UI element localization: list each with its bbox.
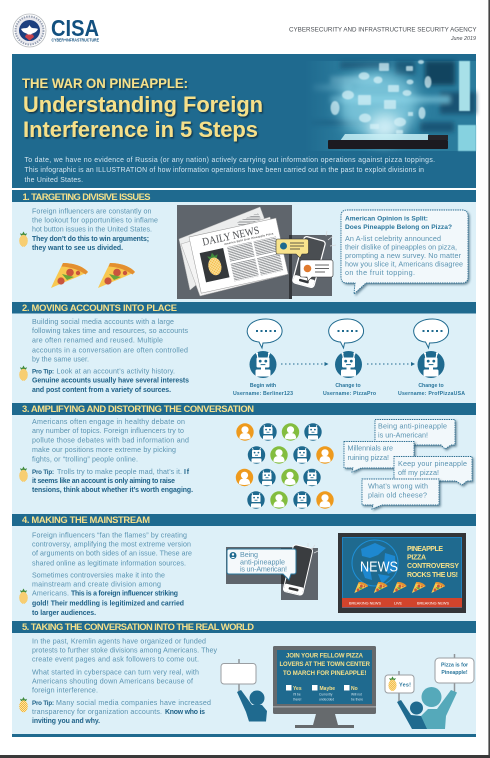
event invitation text — [280, 654, 371, 677]
heading: section 4: 4. MAKING THE MAINSTREAM — [22, 514, 150, 525]
chat bubble: yellow — [276, 239, 308, 258]
text: section 2 body: by the same user. — [32, 356, 89, 364]
callout: American opinion is split — [341, 210, 468, 294]
icon: pineapple bullet — [19, 366, 28, 381]
text: section 3 body: Americans often engage in healthy debate on — [32, 418, 185, 426]
text: section 5 body: In the past, Kremlin agents have organized or funded — [32, 638, 206, 646]
panel: section 4 making the mainstream — [12, 514, 476, 621]
text: section 4 body — [32, 532, 192, 617]
text: section 5 body: inviting you and why. — [32, 718, 100, 725]
callout: American opinion is split: their dislike of pineapples on pizza, — [345, 242, 457, 252]
text: section 2 body: following takes time and resources, so accounts — [32, 327, 188, 335]
heading: section 5: 5. TAKING THE CONVERSATION INTO THE REAL WORLD — [22, 621, 254, 632]
callout: American opinion is split: Does Pineapple Belong on Pizza? — [345, 224, 452, 231]
text: section 5 body: Many social media companies have increased — [56, 699, 211, 707]
icon: smartphone — [292, 236, 326, 288]
heading: section 3: 3. AMPLIFYING AND DISTORTING THE CONVERSATION — [22, 403, 254, 414]
breaking news ticker: BREAKING NEWS — [417, 602, 449, 606]
callout: American opinion is split: American Opinion is Split: — [345, 216, 428, 223]
text: section 5 body: Americans shouting down Americans because of — [32, 678, 193, 686]
text: section 3 body: Pro Tip: — [32, 469, 54, 476]
text: section 2 body: Genuine accounts usually have several interests — [32, 378, 189, 384]
heading: section 2: 2. MOVING ACCOUNTS INTO PLACE — [22, 302, 177, 313]
intro text — [24, 157, 435, 184]
breaking news ticker: LIVE — [394, 602, 402, 606]
heading: section 2 — [12, 302, 476, 314]
RSVP options: undecided — [319, 698, 334, 702]
icon grid: people and bots — [236, 423, 334, 509]
headline: PINEAPPLE — [407, 546, 443, 553]
label: PizzaPro — [323, 383, 376, 397]
hero title: THE WAR ON PINEAPPLE: — [22, 75, 188, 91]
illustration: two protesters with signs: Pineapple! — [441, 670, 468, 676]
headline: CONTROVERSY — [407, 563, 459, 570]
illustration: TV news broadcast — [338, 533, 466, 613]
breaking news ticker: BREAKING NEWS — [349, 602, 381, 606]
CISA wordmark: CYBER+INFRASTRUCTURE — [52, 38, 99, 43]
text: section 4 body: shared online as legitimate information sources. — [32, 560, 186, 568]
illustration: two protesters with signs: Pizza is for — [441, 662, 468, 668]
text: section 2 body: Look at an account’s activity history. — [56, 368, 175, 376]
intro text: the United States. — [24, 177, 83, 184]
label: Berliner123 — [233, 383, 293, 397]
speech bubble: millennials: ruining pizza! — [348, 453, 389, 462]
icon: bot 2 — [335, 351, 362, 378]
label: ProfPizzaUSA: Username: ProfPizzaUSA — [398, 391, 465, 397]
illustration: phone with callout: is un-American! — [240, 564, 287, 574]
text: section 3 body: pollute those debates with bad information and — [32, 436, 189, 444]
panel: section 2 moving accounts into place — [12, 302, 476, 403]
label: Berliner123: Username: Berliner123 — [233, 391, 293, 397]
illustration: two protesters with signs — [385, 654, 474, 729]
text: section 5 body — [32, 638, 217, 725]
hero title: Understanding Foreign — [23, 92, 263, 117]
illustration: protester with blank sign — [221, 659, 267, 722]
callout: American opinion is split: on the fruit topping. — [345, 268, 415, 277]
RSVP options: Currently — [319, 692, 333, 696]
heading: section 1: 1. TARGETING DIVISIVE ISSUES — [22, 191, 150, 202]
text: section 1 body: hot button issues in the United States. — [32, 226, 152, 234]
text: section 5 body: Pro Tip: — [32, 700, 54, 707]
icon: DHS seal — [13, 14, 46, 47]
heading: section 3 — [12, 403, 476, 415]
RSVP options: Maybe — [320, 686, 335, 692]
label: PizzaPro: Change to — [335, 383, 361, 389]
diagram: account renamed three times — [233, 319, 465, 397]
text: section 5 body: create event pages and ask followers to come out. — [32, 656, 199, 664]
text: section 5 body: protests to further stoke divisions among Americans. They — [32, 646, 217, 654]
icons: pizza row — [354, 582, 445, 593]
RSVP options: I’ll be — [293, 692, 301, 696]
speech bubble: being anti-pineapple: is un-American! — [378, 430, 428, 440]
speech bubble: keep your pineapple — [394, 456, 472, 485]
text: section 5 body: Know who is — [165, 709, 205, 716]
speech bubble: millennials — [344, 442, 414, 472]
text: section 3 body — [32, 418, 193, 494]
illustration: newspaper and phone: DAILY NEWS — [201, 225, 260, 249]
text: section 1 body: the lookout for opportunities to inflame — [32, 216, 158, 224]
intro text: This infographic is an ILLUSTRATION of how information operations have been carried out in the past to exploit divisions in — [24, 167, 424, 174]
speech bubble: plain old cheese: What’s wrong with — [368, 482, 428, 490]
illustration: newspaper and phone: America Split Over Pineapple Pizza — [224, 231, 274, 246]
hero title — [22, 75, 263, 142]
panel: section 1 targeting divisive issues — [12, 190, 476, 302]
speech bubble: keep your pineapple: off my pizza! — [398, 468, 439, 477]
text: section 2 body: Building social media accounts with a large — [32, 318, 174, 326]
text: section 4 body: of arguments on both sides of an issue. These are — [32, 550, 192, 558]
heading: section 4 — [12, 514, 476, 526]
arrow: second rename — [367, 362, 415, 366]
illustration: phone with callout — [226, 543, 318, 600]
agency name and date — [289, 27, 477, 42]
text: section 4 body: Foreign influencers “fan the flames” by creating — [32, 532, 187, 540]
text: section 5 body: What started in cyberspace can turn very real, with — [32, 668, 199, 676]
event invitation text: JOIN YOUR FELLOW PIZZA — [286, 654, 364, 660]
label: Berliner123: Begin with — [250, 383, 276, 389]
speech bubble: plain old cheese: plain old cheese? — [368, 490, 427, 500]
text: section 4 body: mainstream and create division among — [32, 580, 161, 588]
text: section 1 body: Foreign influencers are constantly on — [32, 208, 152, 216]
chat bubble: white — [300, 260, 333, 281]
illustration: phone with callout: Being — [240, 550, 258, 559]
text: section 2 body: Pro Tip: — [32, 368, 54, 376]
speech bubble 2 — [329, 319, 364, 348]
text: section 3 body: tensions, think about whether it’s worth engaging. — [32, 487, 193, 494]
icon: pineapple bullet — [19, 466, 28, 482]
text: section 1 body — [32, 208, 158, 252]
text: section 3 body: make our positions more extreme by picking — [32, 446, 176, 454]
text: section 3 body: it seems like an account is only aiming to raise — [32, 478, 175, 485]
breaking news ticker — [342, 598, 462, 608]
RSVP options — [286, 685, 363, 702]
illustration: TV news broadcast: NEWS — [360, 558, 398, 576]
illustration: newspaper and phone — [177, 205, 336, 299]
callout: American opinion is split: how you slice it, Americans disagree — [345, 260, 463, 268]
event invitation text: LOVERS AT THE TOWN CENTER — [280, 662, 371, 668]
heading: section 5 — [12, 621, 476, 633]
RSVP options: Will not — [351, 692, 362, 696]
speech bubble: being anti-pineapple — [375, 420, 455, 449]
text: section 4 body: Sometimes controversies make it into the — [32, 572, 165, 580]
RSVP options: there! — [293, 698, 302, 702]
text: section 2 body: accounts in a conversation are often controlled — [32, 346, 188, 354]
illustration: phone with callout: anti-pineapple — [240, 558, 285, 566]
text: section 4 body: to larger audiences. — [32, 610, 96, 617]
agency name and date: June 2019 — [450, 36, 476, 42]
speech bubble 3 — [414, 319, 449, 348]
event invitation text: TO MARCH FOR PINEAPPLE! — [283, 671, 366, 677]
panel: section 3 amplifying and distorting — [12, 403, 476, 514]
icons: pizza slices — [51, 263, 135, 288]
footer bar — [12, 734, 476, 737]
speech bubble: plain old cheese — [362, 479, 439, 509]
headline: PIZZA — [407, 554, 426, 562]
hero image: tablet projecting social media icons — [305, 60, 476, 151]
text: section 4 body: Americans. — [32, 590, 69, 598]
illustration: monitor with event page — [273, 646, 376, 728]
illustration: two protesters with signs: Yes! — [399, 682, 411, 688]
hero title: Interference in 5 Steps — [23, 117, 258, 142]
label: PizzaPro: Username: PizzaPro — [323, 391, 376, 397]
text: section 2 body: and post content from a variety of sources. — [32, 387, 171, 394]
text: section 3 body: fights, or “trolling” people online. — [32, 456, 138, 464]
label: ProfPizzaUSA: Change to — [418, 383, 444, 389]
icon: pineapple bullet — [19, 232, 28, 247]
text: section 5 body: foreign interference. — [32, 686, 98, 694]
intro text: To date, we have no evidence of Russia (or any nation) actively carrying out information operations against pizza toppings. — [24, 157, 435, 164]
text: section 1 body: They don’t do this to win arguments; — [32, 236, 149, 243]
agency name and date: CYBERSECURITY AND INFRASTRUCTURE SECURITY AGENCY — [289, 27, 477, 34]
icon: bot 3 — [418, 351, 444, 378]
panel: hero banner — [12, 54, 476, 188]
panel: section 5 taking the conversation into the real world — [12, 621, 476, 737]
icon: globe — [352, 540, 398, 586]
heading: section 1 — [12, 190, 476, 202]
speech bubble: being anti-pineapple: Being anti-pineapple — [378, 422, 447, 431]
callout: American opinion is split: An A-list celebrity announced — [345, 234, 441, 243]
RSVP options: Yes — [293, 686, 302, 692]
text: section 2 body — [32, 318, 189, 394]
logo: DHS seal and CISA wordmark — [13, 14, 99, 47]
headline — [407, 546, 459, 579]
icon: pineapple bullet — [19, 697, 28, 712]
text: section 1 body: they want to see us divided. — [32, 245, 123, 252]
text: section 3 body: If — [184, 469, 190, 476]
text: section 4 body: controversy, amplifying the most extreme version — [32, 540, 191, 548]
text: section 3 body: Trolls try to make people mad, that’s it. — [57, 468, 182, 476]
icon: pineapple bullet — [19, 588, 28, 604]
text: section 3 body: any number of topics. Foreign influencers try to — [32, 427, 184, 435]
text: section 5 body: transparency for organization accounts. — [32, 708, 162, 716]
text: section 4 body: This is a foreign influencer striking — [71, 590, 178, 598]
headline: ROCKS THE US! — [407, 572, 458, 579]
speech bubble: millennials: Millennials are — [348, 444, 393, 452]
speech bubble: keep your pineapple: Keep your pineapple — [398, 459, 467, 468]
text: section 4 body: gold! Their meddling is legitimized and carried — [32, 600, 184, 608]
arrow: first rename — [281, 362, 328, 366]
CISA wordmark: CISA — [51, 15, 99, 41]
icon: bot 1 — [250, 351, 276, 378]
text: section 2 body: are often renamed and reused. Multiple — [32, 336, 163, 344]
callout: American opinion is split: prompting a new survey. No matter — [345, 251, 462, 260]
speech bubble 1 — [247, 319, 282, 348]
label: ProfPizzaUSA — [398, 383, 465, 397]
RSVP options: No — [351, 686, 358, 692]
RSVP options: be there — [351, 698, 363, 702]
